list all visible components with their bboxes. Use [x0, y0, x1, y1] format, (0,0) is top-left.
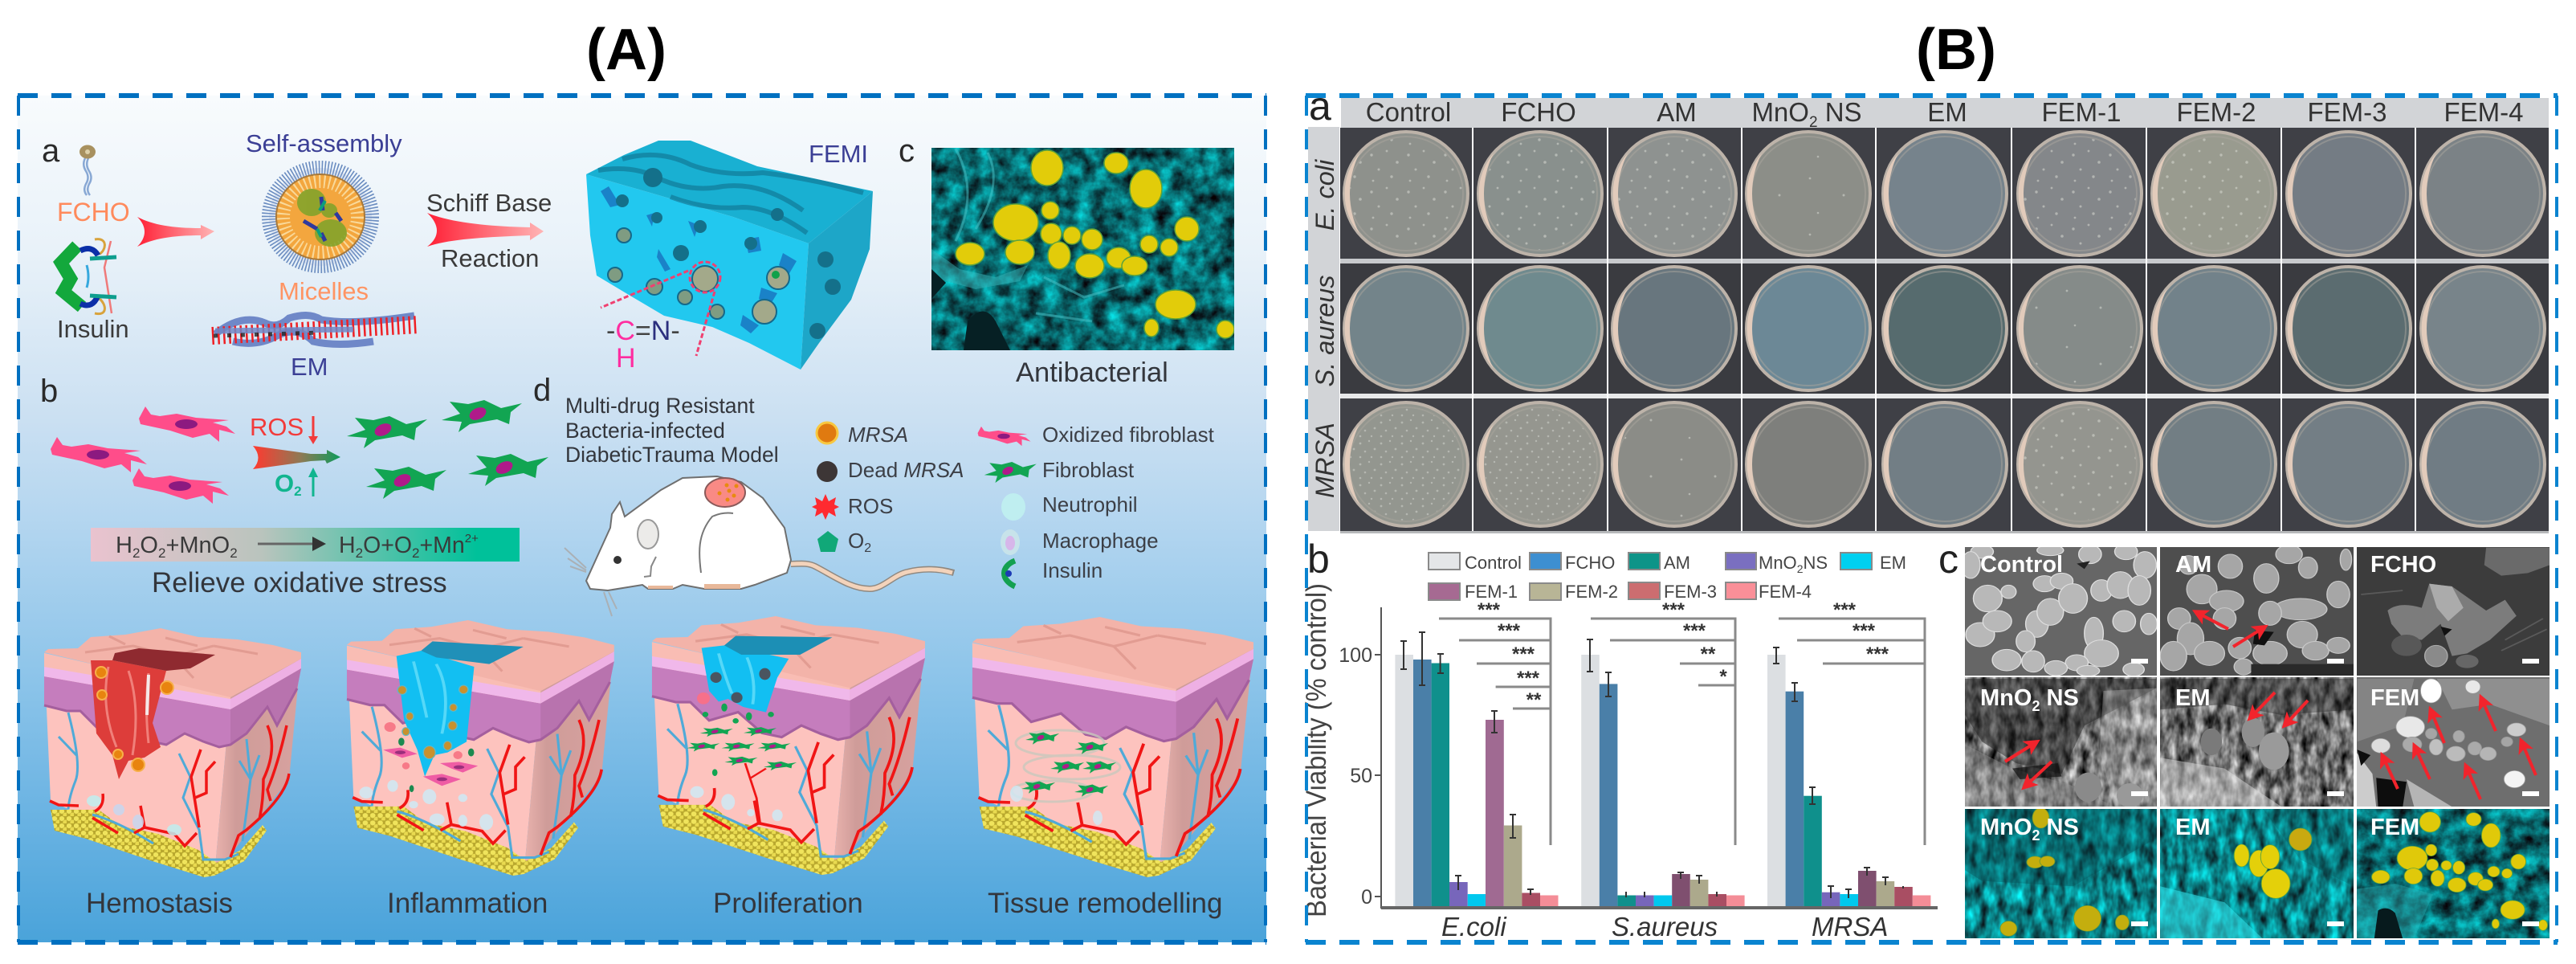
SEM colored: MnO2 NS: NS	[2040, 815, 2079, 840]
reaction box	[91, 528, 520, 562]
SEM: EM	[2160, 677, 2354, 807]
legend: ROS	[812, 494, 893, 520]
significance brackets: ***	[1498, 620, 1521, 642]
skin block: Tissue remodelling	[972, 617, 1253, 877]
legend: Neutrophil	[1001, 492, 1138, 521]
SEM colored: MnO2 NS: 2	[2032, 827, 2040, 844]
legend: Dead MRSA: Dead MRSA	[848, 458, 964, 482]
SEM: AM: AM	[2175, 552, 2211, 578]
reaction box: O	[140, 533, 158, 558]
bar chart legend: 2	[1797, 562, 1804, 575]
bar chart legend: FCHO	[1565, 553, 1615, 573]
SEM: AM	[2160, 547, 2354, 676]
SEM colored: EM: EM	[2175, 815, 2210, 840]
significance brackets: ***	[1683, 620, 1706, 642]
y axis title: Bacterial Viability (% control)	[1301, 583, 1332, 917]
y axis: 100	[1339, 644, 1372, 667]
significance brackets: ***	[1866, 643, 1889, 665]
column headers: FEM-3	[2308, 97, 2386, 127]
petri dishes: MRSA	[1344, 402, 2545, 526]
bar chart legend: EM	[1880, 553, 1906, 573]
legend: Neutrophil: Neutrophil	[1042, 492, 1138, 517]
formula -C=N-H: H	[616, 343, 636, 374]
bar chart legend: AM	[1664, 553, 1690, 573]
legend: O2: O	[848, 529, 864, 553]
formula -C=N-H: -C=N-	[606, 316, 680, 346]
text FEMI: FEMI	[809, 140, 868, 168]
hydrogel block FEMI	[586, 141, 873, 370]
SEM colored: MnO2 NS	[1965, 809, 2157, 938]
significance brackets: ***	[1662, 599, 1685, 621]
label a: a	[42, 133, 60, 169]
title (B): (B)	[1916, 18, 1996, 82]
formula -C=N-H	[606, 316, 680, 374]
bar chart legend: FEM-1	[1465, 582, 1518, 602]
icon: FCHO molecule	[79, 145, 96, 195]
label b: b	[1307, 537, 1330, 582]
text model title: Multi-drug Resistant	[565, 394, 755, 418]
SEM colored: FEM: FEM	[2370, 815, 2419, 840]
reaction box: O+O	[363, 533, 412, 558]
SEM: FEM: FEM	[2370, 685, 2419, 711]
bars: S. aureus	[1581, 639, 1745, 908]
SEM: FCHO: FCHO	[2370, 552, 2436, 578]
legend: O2	[817, 529, 871, 555]
column headers: FEM-2	[2176, 97, 2256, 127]
text O2 with up arrow: O	[275, 469, 294, 497]
SEM: MnO2 NS: 2	[2032, 698, 2040, 714]
reaction box: +Mn	[420, 533, 465, 558]
label d: d	[533, 373, 551, 408]
reaction box: +MnO	[165, 533, 230, 558]
SEM: Control: Control	[1980, 552, 2063, 578]
SEM: MnO2 NS	[1965, 677, 2157, 807]
significance brackets	[1439, 599, 1925, 845]
text Relieve oxidative stress: Relieve oxidative stress	[152, 567, 447, 598]
skin block: Proliferation	[652, 616, 925, 875]
column headers: FEM-4	[2444, 97, 2523, 127]
label a: a	[1309, 84, 1331, 129]
y axis: 0	[1361, 886, 1372, 909]
y axis	[1339, 607, 1381, 909]
text O2 with up arrow: 2	[294, 484, 302, 499]
SEM: EM: EM	[2175, 685, 2210, 711]
reaction box: H	[339, 533, 356, 558]
text O2 with up arrow	[275, 468, 318, 499]
group labels: E.coli	[1441, 912, 1507, 942]
reaction box: 2	[132, 545, 140, 561]
petri dishes: E. coli	[1344, 132, 2545, 255]
reaction box: 2+	[465, 532, 479, 545]
title (A): (A)	[586, 18, 666, 82]
bars: E. coli	[1395, 632, 1558, 908]
column headers: FCHO	[1501, 97, 1576, 127]
SEM: MnO2 NS: NS	[2040, 685, 2079, 711]
text Hemostasis: Hemostasis	[86, 888, 233, 919]
row label MRSA: MRSA	[1310, 423, 1339, 498]
text Inflammation: Inflammation	[387, 888, 548, 919]
petri dishes: S. aureus	[1344, 267, 2545, 390]
text model title: Bacteria-infected	[565, 419, 725, 443]
text Tissue remodelling: Tissue remodelling	[988, 888, 1222, 919]
group labels: S.aureus	[1612, 912, 1718, 942]
column headers: EM	[1927, 97, 1967, 127]
arrow: FCHO to micelle	[137, 217, 214, 247]
column headers: 2	[1809, 114, 1818, 131]
text Insulin: Insulin	[57, 315, 129, 343]
significance brackets: ***	[1853, 620, 1876, 642]
dashed frame: panel A	[18, 96, 1266, 942]
legend: Oxidized fibroblast: Oxidized fibroblast	[1042, 423, 1215, 447]
significance brackets: *	[1719, 666, 1727, 688]
reaction box: H	[116, 533, 132, 558]
column headers: AM	[1657, 97, 1697, 127]
label b: b	[40, 374, 58, 409]
arrow: oxidized to healthy cells	[253, 446, 340, 469]
significance brackets: ***	[1833, 599, 1857, 621]
legend: Macrophage	[1001, 529, 1159, 555]
column headers: FEM-1	[2041, 97, 2122, 127]
text model title	[565, 394, 779, 467]
healthy fibroblast cells	[347, 400, 548, 499]
x axis	[1381, 906, 1938, 909]
reaction box: 2	[230, 545, 238, 561]
legend: Insulin	[1004, 558, 1103, 586]
legend: Insulin: Insulin	[1042, 558, 1103, 582]
icon: micelle	[269, 168, 372, 266]
SEM grid	[1961, 544, 2550, 938]
text Schiff Base: Schiff Base	[426, 189, 552, 217]
reaction box: 2	[158, 545, 165, 561]
legend: O2: 2	[864, 541, 871, 555]
SEM: Control	[1965, 547, 2157, 676]
skin block: Inflammation	[347, 620, 614, 876]
y axis: 50	[1350, 765, 1372, 787]
reaction box: 2	[412, 545, 420, 561]
SEM colored: EM	[2160, 809, 2354, 938]
text Antibacterial: Antibacterial	[1016, 357, 1168, 388]
bar chart legend: MnO	[1759, 553, 1797, 573]
bar chart legend: NS	[1803, 553, 1828, 573]
legend: MRSA: MRSA	[848, 423, 908, 447]
legend: MRSA	[817, 423, 908, 447]
label c: c	[1938, 537, 1958, 582]
legend: ROS: ROS	[848, 494, 893, 518]
row label E. coli: E. coli	[1310, 159, 1339, 231]
SEM: MnO2 NS: MnO	[1980, 685, 2032, 711]
bar chart legend: Control	[1465, 553, 1522, 573]
significance brackets: ***	[1517, 668, 1540, 689]
label c: c	[899, 133, 915, 169]
arrow: Schiff base reaction	[427, 213, 544, 247]
significance brackets: ***	[1478, 599, 1501, 621]
panel B: antibacterial results	[1301, 84, 2550, 942]
dashed frame: panel B	[1306, 96, 2558, 942]
column headers: NS	[1818, 97, 1862, 127]
SEM: FEM	[2357, 677, 2550, 807]
group labels	[1441, 912, 1888, 942]
legend: Macrophage: Macrophage	[1042, 529, 1159, 553]
text ROS with down arrow: ROS	[250, 413, 304, 441]
column headers	[1366, 97, 2523, 131]
panel A: FEMI hydrogel scheme	[18, 96, 1266, 942]
bar chart legend: FEM-3	[1664, 582, 1717, 602]
bar chart	[1339, 599, 1938, 942]
group labels: MRSA	[1812, 912, 1888, 942]
text Self-assembly: Self-assembly	[246, 129, 402, 157]
legend: Fibroblast: Fibroblast	[1042, 458, 1135, 482]
column headers: Control	[1366, 97, 1451, 127]
reaction box: 2	[356, 545, 363, 561]
bar chart legend	[1429, 553, 1906, 602]
skin block: Hemostasis	[44, 628, 301, 877]
text model title: DiabeticTrauma Model	[565, 443, 779, 467]
text Reaction: Reaction	[441, 244, 539, 272]
plate photo grid	[1308, 97, 2549, 533]
icon: EM nanosheet	[212, 315, 419, 344]
legend: Fibroblast	[984, 458, 1135, 483]
legend	[812, 423, 1215, 586]
significance brackets: **	[1701, 643, 1716, 665]
oxidized fibroblast cells	[51, 406, 235, 504]
text Proliferation: Proliferation	[713, 888, 863, 919]
text EM: EM	[291, 353, 328, 381]
significance brackets: **	[1526, 689, 1542, 711]
significance brackets: ***	[1512, 643, 1535, 665]
row label S. aureus: S. aureus	[1310, 275, 1339, 387]
SEM colored: FEM	[2357, 809, 2550, 938]
bars: MRSA	[1767, 647, 1930, 908]
SEM: FCHO	[2357, 547, 2550, 676]
text Micelles: Micelles	[279, 277, 369, 305]
column headers: MnO	[1751, 97, 1809, 127]
SEM image with yellow bacteria	[931, 148, 1234, 350]
SEM colored: MnO2 NS: MnO	[1980, 815, 2032, 840]
bar chart legend: FEM-2	[1565, 582, 1618, 602]
icon: mouse	[565, 476, 954, 616]
text FCHO: FCHO	[57, 198, 130, 227]
bar chart legend: FEM-4	[1759, 582, 1812, 602]
icon: insulin protein	[61, 239, 116, 314]
